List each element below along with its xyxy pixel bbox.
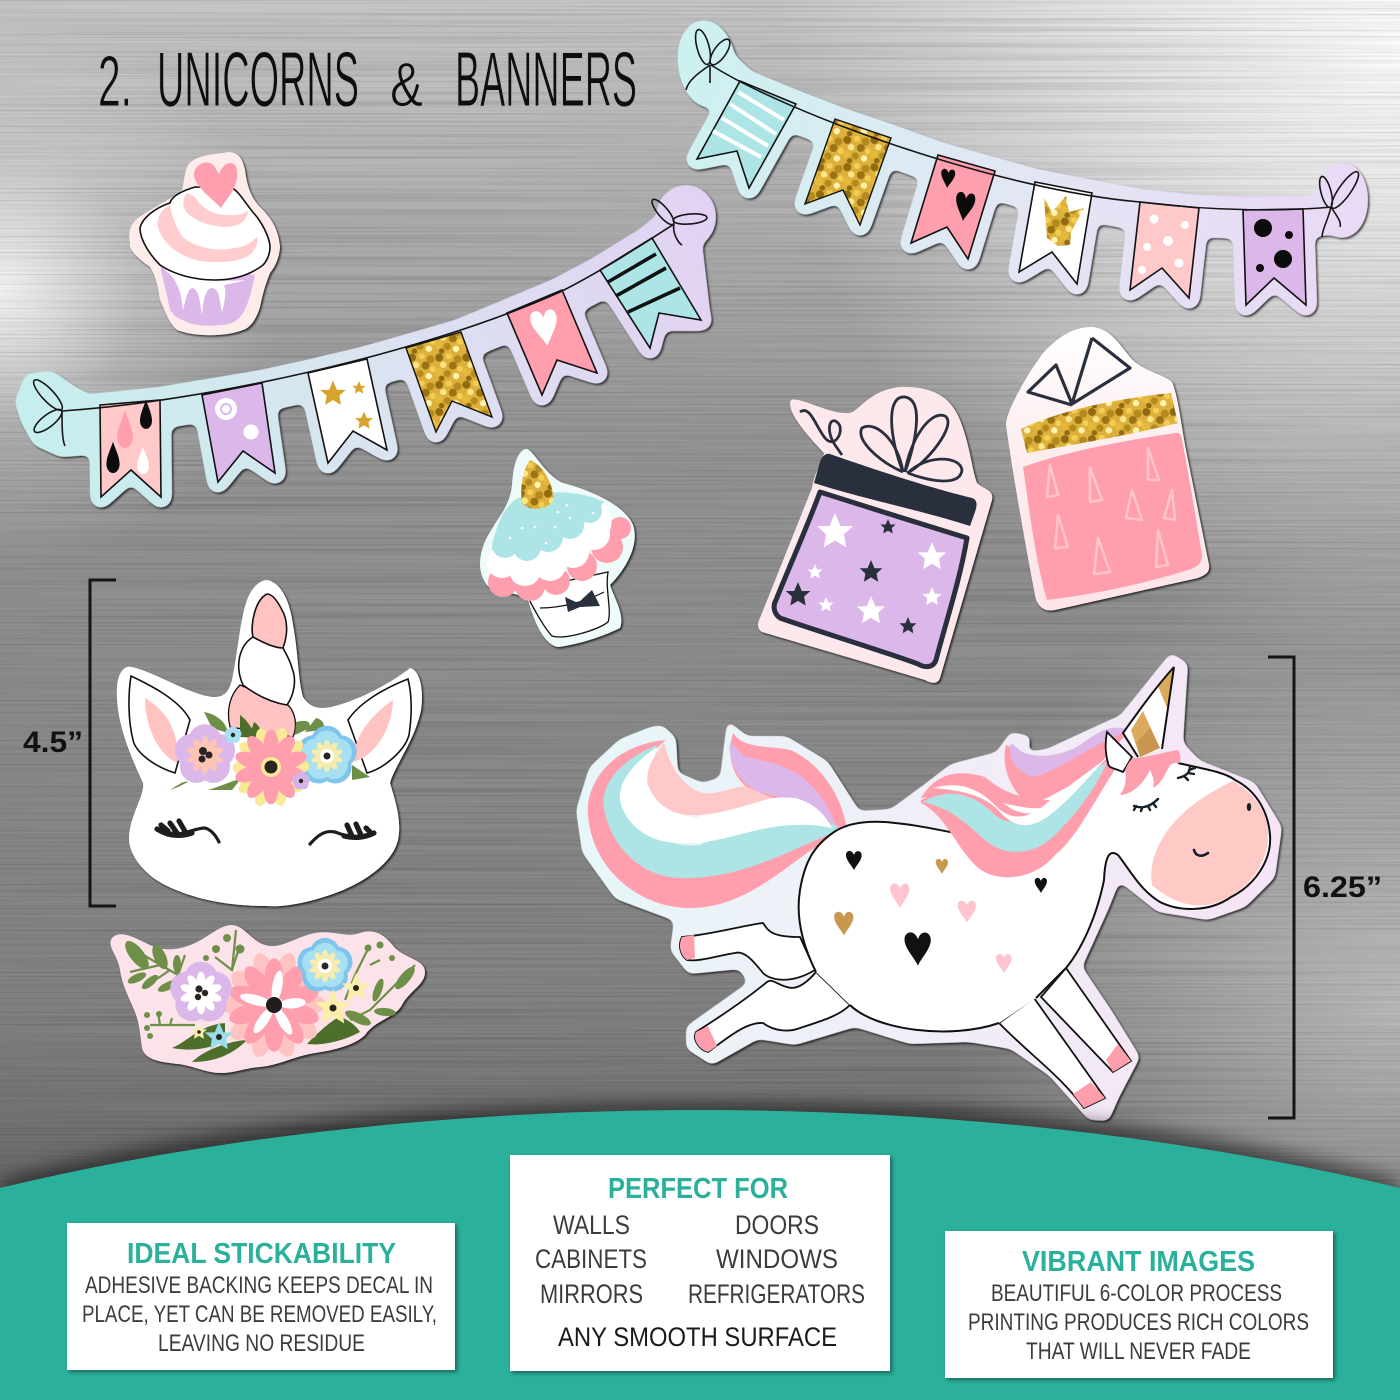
dark leaves — [172, 1017, 360, 1062]
teal frosting layer — [492, 492, 604, 561]
flag: pink dots — [1130, 202, 1199, 298]
flag: pink drops — [100, 400, 161, 497]
tail: lilac and pink lock — [730, 733, 846, 832]
info box: perfect for: MIRRORS — [540, 1279, 643, 1309]
dimension: 6.25 inch bracket: 6.25” — [1303, 871, 1382, 904]
far hind leg — [680, 923, 815, 980]
banner magnet: left — [24, 196, 707, 497]
info box: ideal stickability: ADHESIVE BACKING KEEPS DECAL IN — [85, 1272, 433, 1299]
cupcake frosting swirl — [158, 193, 258, 262]
flag: white stars — [308, 359, 387, 463]
cupcake magnet: swirl frosting — [129, 152, 280, 335]
gift outline — [1006, 327, 1209, 611]
floral outline — [110, 925, 425, 1073]
unicorn head magnet — [117, 580, 422, 906]
pink flower — [222, 716, 320, 818]
info box: ideal stickability: PLACE, YET CAN BE REMOVED EASILY, — [82, 1301, 437, 1328]
dimension: 6.25 inch bracket — [1268, 657, 1382, 1118]
pink flower — [207, 937, 341, 1073]
gold horn — [521, 460, 554, 509]
gift outline — [758, 387, 992, 683]
green sprigs — [126, 930, 415, 1025]
yellow flowers — [315, 973, 370, 1023]
info box: perfect for: REFRIGERATORS — [688, 1279, 865, 1309]
text: BANNERS — [455, 35, 637, 123]
pink triangles — [1047, 448, 1175, 574]
info box: perfect for: CABINETS — [535, 1244, 647, 1274]
forelock — [1120, 750, 1180, 795]
info box: perfect for: DOORS — [735, 1210, 819, 1240]
banner outline — [24, 196, 705, 497]
banner outline — [685, 29, 1357, 305]
cupcake outline — [129, 152, 280, 335]
flag: lilac spots — [1243, 209, 1306, 305]
lilac flower — [170, 962, 232, 1021]
head outline — [117, 580, 422, 906]
gift bow — [1028, 338, 1130, 405]
floral crown magnet — [110, 925, 425, 1073]
body line — [799, 822, 1118, 1031]
horn — [228, 594, 295, 737]
info box: perfect for: PERFECT FOR — [608, 1173, 788, 1205]
info box: ideal stickability: IDEAL STICKABILITY — [127, 1238, 396, 1270]
info box: vibrant images: VIBRANT IMAGES — [1022, 1246, 1255, 1278]
gift magnet: purple box — [758, 387, 992, 683]
body and head — [799, 757, 1270, 1033]
dimension: 4.5 inch bracket: 4.5” — [23, 726, 83, 759]
title: & — [390, 51, 423, 120]
cupcake outline — [480, 449, 635, 647]
eyes — [157, 821, 374, 844]
info box: perfect for: ANY SMOOTH SURFACE — [558, 1322, 837, 1352]
blue flower — [297, 938, 353, 991]
info box: vibrant images: THAT WILL NEVER FADE — [1026, 1338, 1251, 1365]
cupcake heart — [194, 163, 237, 208]
info box: ideal stickability — [67, 1223, 455, 1370]
gift box — [774, 492, 967, 667]
lilac flower — [175, 724, 235, 783]
flower crown — [170, 712, 370, 818]
dimension: 4.5 inch bracket — [23, 580, 116, 906]
white frosting layer — [487, 492, 611, 586]
title: 2. — [98, 42, 132, 122]
info box: vibrant images: PRINTING PRODUCES RICH COLORS — [968, 1309, 1309, 1336]
info box: perfect for: WALLS — [553, 1210, 630, 1240]
far front leg — [1041, 968, 1131, 1072]
small flowers — [191, 1022, 233, 1049]
info box: perfect for: WINDOWS — [716, 1244, 838, 1274]
banner magnet: top right — [685, 28, 1363, 305]
flag: striped teal — [697, 81, 796, 188]
cupcake wrapper — [160, 265, 255, 326]
hearts — [834, 851, 1047, 973]
white and dark stars — [786, 513, 946, 633]
flag: gold glitter — [406, 332, 492, 432]
gift magnet: pink box — [1006, 327, 1209, 611]
info box: vibrant images — [945, 1231, 1333, 1378]
small flowers — [225, 726, 241, 743]
unicorn outline — [577, 654, 1281, 1120]
muzzle — [1151, 781, 1268, 905]
tail: main stripes — [588, 740, 838, 908]
gift panel — [1023, 433, 1202, 600]
cupcake base — [524, 572, 609, 637]
near hind leg — [695, 972, 850, 1052]
gift bow — [800, 397, 962, 481]
gold band — [1021, 393, 1178, 453]
near front leg — [999, 998, 1105, 1108]
banner string and bows — [30, 197, 707, 446]
title: UNICORNS — [157, 35, 359, 123]
rainbow unicorn magnet — [577, 654, 1281, 1120]
info box: vibrant images: BEAUTIFUL 6-COLOR PROCESS — [991, 1280, 1282, 1307]
gift lid — [814, 454, 977, 526]
horn — [1123, 667, 1174, 757]
flag: lilac swirl — [202, 383, 275, 482]
crown leaves — [170, 712, 370, 790]
flag: pink hearts — [911, 155, 995, 259]
banner string and bows — [686, 28, 1363, 237]
cupcake magnet: unicorn horn — [480, 449, 635, 647]
bow tie — [540, 590, 604, 612]
info box: ideal stickability: LEAVING NO RESIDUE — [158, 1330, 365, 1357]
mane — [921, 728, 1130, 877]
eyes — [1134, 767, 1195, 811]
teal footer arc — [0, 1102, 1400, 1400]
pink frosting layer — [488, 517, 631, 601]
info box: perfect for — [510, 1155, 890, 1371]
flag: white with gold crown — [1019, 182, 1092, 284]
blue flower — [297, 726, 357, 783]
flag: gold glitter — [805, 119, 891, 225]
ear — [1106, 732, 1132, 772]
cupcake frosting — [140, 187, 270, 280]
nostril and mouth — [1194, 803, 1251, 856]
ears — [129, 676, 411, 773]
flag: teal stripes — [600, 238, 701, 348]
flag: pink heart — [507, 290, 597, 395]
